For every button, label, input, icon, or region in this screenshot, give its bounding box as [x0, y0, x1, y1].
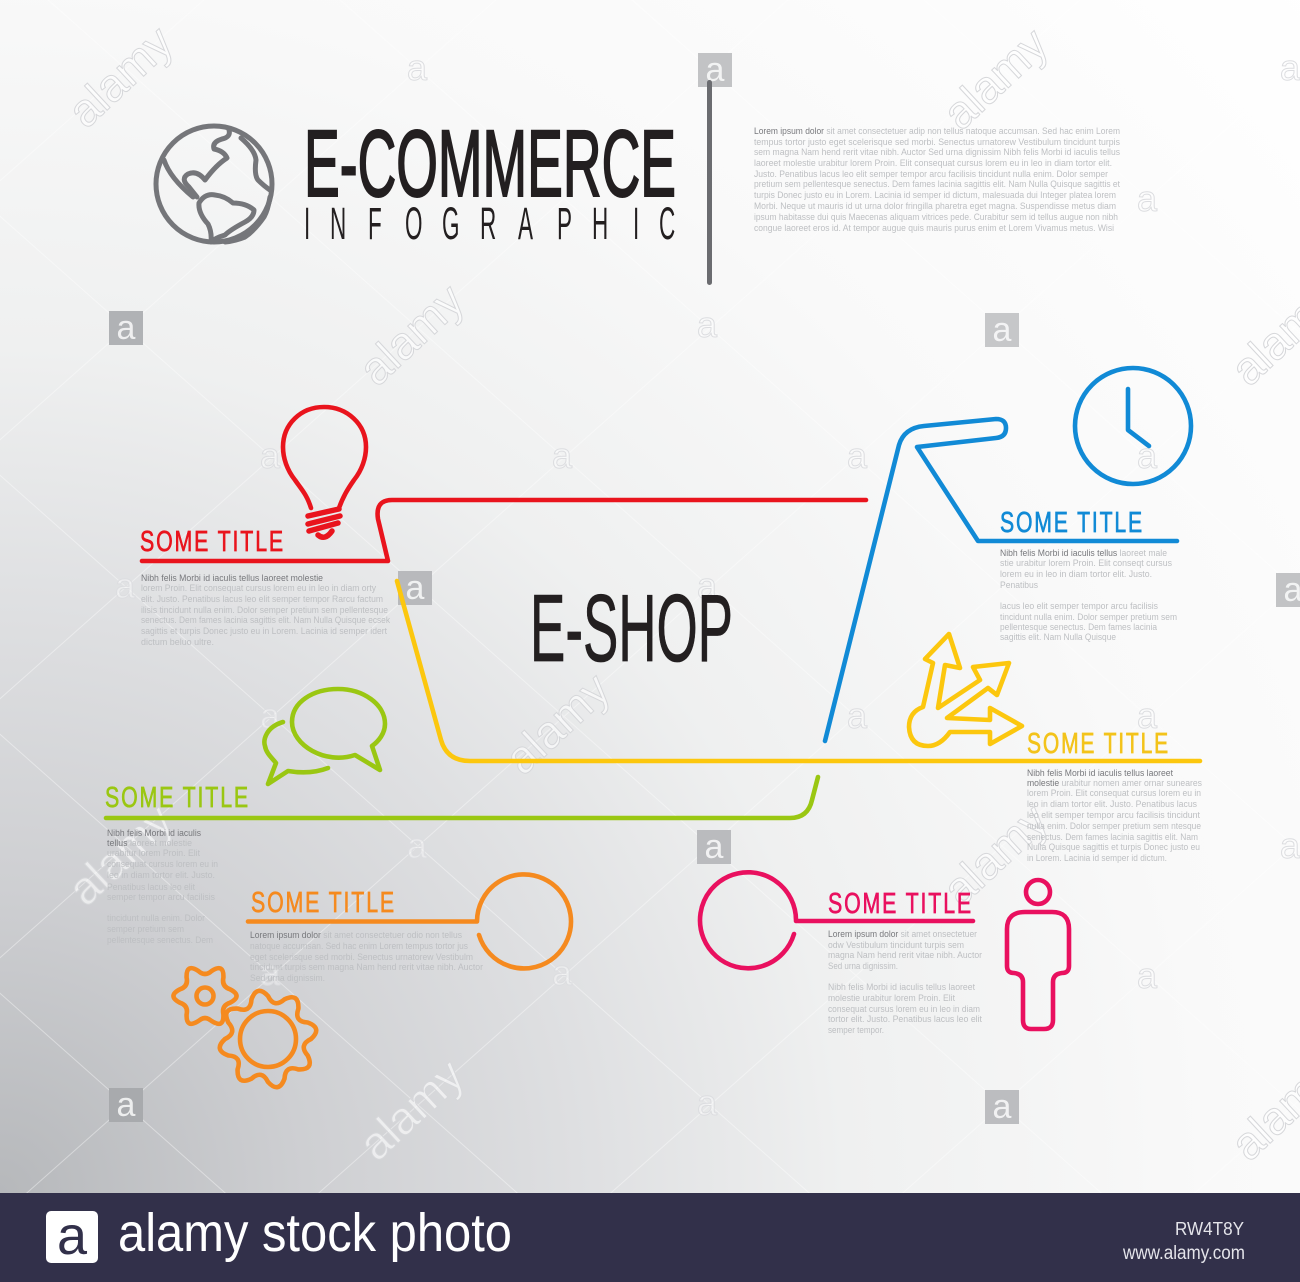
text block: Lorem ipsum dolor sit amet consectetuer odio non tellus — [250, 930, 462, 940]
watermark: diagonal alamy wordmarks: alamy — [348, 1048, 474, 1170]
watermark: faint outline letters: a — [1280, 47, 1300, 88]
watermark: faint outline letters: a — [115, 565, 136, 606]
watermark: diagonal alamy wordmarks: alamy — [57, 15, 183, 137]
icon: branching arrows — [909, 634, 1022, 746]
line: magenta basket wheel — [700, 872, 973, 968]
text block — [250, 930, 483, 983]
watermark: grey square badges: a — [117, 1086, 136, 1124]
watermark: faint outline letters: a — [407, 825, 428, 866]
heading: SOME TITLE — [105, 782, 250, 814]
text block: sagittis elit. Nam Nulla Quisque — [1000, 632, 1116, 642]
line: red basket rim — [142, 500, 866, 561]
intro text block: sem magna Nam hend rerit vitae nibh. Auctor Sed urna dignissim Nibh felis Morbi id iaculis tellus — [754, 147, 1120, 157]
text block: tincidunt turpis sem magna Nam hend rerit vitae nibh. Auctor — [250, 962, 483, 972]
watermark: faint outline letters: a — [260, 695, 281, 736]
watermark: faint outline letters: a — [1137, 955, 1158, 996]
intro text block: ipsum habitasse dui quis Maecenas aliquam vitrices pede. Curabitur sem id tellus augue non nibh — [754, 212, 1118, 222]
text block: Penatibus — [1000, 580, 1038, 590]
watermark: faint outline letters: a — [1137, 178, 1158, 219]
text block: consequat cursus lorem eu in leo in diam — [828, 1004, 980, 1014]
heading: SOME TITLE — [828, 888, 973, 920]
text block — [1027, 768, 1202, 863]
text block — [141, 573, 390, 647]
watermark: diagonal alamy wordmarks: alamy — [932, 793, 1058, 915]
watermark: faint outline letters: a — [1137, 435, 1158, 476]
intro text block: Justo. Penatibus lacus leo elit semper tempor arcu facilisis tincidunt nulla enim. Dolor semper — [754, 169, 1108, 179]
watermark: grey square badges: a — [117, 309, 136, 347]
watermark: grey square badges: a — [705, 828, 724, 866]
watermark: faint outline letters: a — [847, 695, 868, 736]
text block: Nibh felis Morbi id iaculis tellus laoreet male — [1000, 548, 1167, 558]
watermark: grey square badges — [109, 51, 1300, 1126]
watermark: grey square badges: a — [993, 311, 1012, 349]
text block: magna Nam hend rerit vitae nibh. Auctor — [828, 950, 982, 960]
text block: lorem eu in leo in diam tortor elit. Justo. — [1000, 569, 1152, 579]
heading: SOME TITLE — [1027, 728, 1170, 760]
text block: leo in diam tortor elit. Justo. — [107, 870, 215, 880]
site url: www.alamy.com — [1122, 1243, 1245, 1264]
vertical divider — [707, 80, 712, 285]
watermark: faint outline letters — [115, 47, 1300, 1123]
intro text block: laoreet molestie urabitur lorem Proin. Elit consequat cursus lorem eu in leo in diam tortor elit. — [754, 158, 1112, 168]
line: yellow basket base — [397, 581, 1200, 761]
wordmark: alamy stock photo — [118, 1203, 512, 1263]
watermark: faint outline letters: a — [260, 435, 281, 476]
text block: Sed urna dignissim. — [828, 961, 898, 971]
text block: in Lorem. Lacinia id semper id dictum. — [1027, 853, 1167, 863]
watermark: faint outline letters: a — [552, 952, 573, 993]
watermark: faint outline letters: a — [847, 435, 868, 476]
watermark: faint outline letters: a — [697, 565, 718, 606]
watermark: diagonal alamy wordmarks: alamy — [932, 17, 1058, 139]
image id: RW4T8Y — [1175, 1219, 1244, 1239]
text block: tellus laoreet molestie — [107, 838, 192, 848]
text block: urabitur lorem Proin. Elit — [107, 848, 200, 858]
text block: tincidunt nulla enim. Dolor semper pretium sem — [1000, 612, 1177, 622]
watermark: diagonal alamy wordmarks: alamy — [57, 793, 183, 915]
text block: leo elit semper tempor arcu facilisis tincidunt — [1027, 810, 1200, 820]
center label: E-SHOP: E-SHOP — [530, 575, 733, 682]
heading: SOME TITLE — [1000, 507, 1144, 539]
logo badge: a — [57, 1206, 88, 1266]
heading: SOME TITLE — [251, 887, 396, 919]
watermark: faint outline letters: a — [1280, 825, 1300, 866]
text block: Nibh felis Morbi id iaculis tellus laoreet — [1027, 768, 1173, 778]
text block — [828, 929, 982, 1035]
watermark: faint outline letters: a — [697, 304, 718, 345]
text block: pellentesque senectus. Dem fames lacinia — [1000, 622, 1157, 632]
watermark: faint outline letters: a — [697, 1082, 718, 1123]
icon: globe — [156, 126, 272, 242]
section: yellow directions — [397, 581, 1202, 863]
watermark: diagonal alamy wordmarks: alamy — [348, 273, 474, 395]
text block: Nibh felis Morbi id iaculis tellus laoreet — [828, 982, 975, 992]
watermark: faint outline letters: a — [552, 435, 573, 476]
text block: semper tempor. — [828, 1025, 884, 1035]
text block: dictum beluo ultre. — [141, 637, 214, 647]
text block: sagittis et turpis Donec justo eu in Lorem. Lacinia id semper idert — [141, 626, 387, 636]
text block: odw Vestibulum tincidunt turpis sem — [828, 940, 964, 950]
watermark: diagonal alamy wordmarks: alamy — [494, 662, 620, 784]
section: blue time — [825, 368, 1191, 741]
text block: semper pretium sem — [107, 924, 184, 934]
text block: molestie urabitur lorem Proin. Elit — [828, 993, 955, 1003]
text block: Nulla Quisque sagittis et turpis Donec justo eu — [1027, 842, 1200, 852]
intro text block: congue laoreet eros id. At tempor augue quis mauris purus enim et Lorem Vivamus metus. Wisi — [754, 223, 1114, 233]
watermark: grey square badges: a — [993, 1088, 1012, 1126]
header — [156, 80, 1120, 285]
section: orange settings — [173, 874, 571, 1087]
text block: Penatibus lacus leo elit — [107, 882, 195, 892]
line: blue basket handle — [825, 419, 1177, 741]
footer: alamy stock photo bar — [0, 1193, 1300, 1282]
title: E-COMMERCE: E-COMMERCE — [304, 111, 676, 217]
watermark: grey square badges: a — [406, 569, 425, 607]
text block: stie urabitur lorem Proin. Elit conseqt cursus — [1000, 558, 1172, 568]
watermark: grey square badges: a — [706, 51, 725, 89]
icon: person — [1007, 880, 1069, 1029]
text block: lorem Proin. Elit consequat cursus lorem eu in leo in diam orty — [141, 583, 376, 593]
logo badge — [46, 1206, 98, 1266]
text block — [1000, 548, 1177, 642]
heading: SOME TITLE — [140, 526, 285, 558]
text block: molestie urabitur nomen amer ornar suneares — [1027, 778, 1202, 788]
section: magenta customer — [700, 872, 1069, 1035]
section: red idea — [140, 407, 866, 647]
icon: clock — [1075, 368, 1191, 484]
watermark: faint outline letters: a — [260, 952, 281, 993]
intro text block: Morbi. Neque ut mauris id ut urna dolor fringilla pharetra eget magna. Suspendisse metus diam — [754, 201, 1116, 211]
text block: Nibh felis Morbi id iaculis tellus laoreet molestie — [141, 573, 323, 583]
intro text block — [754, 126, 1120, 233]
text block: leo in diam tortor elit. Justo. Penatibus lacus — [1027, 799, 1197, 809]
text block: lorem Proin. Elit consequat cursus lorem eu in — [1027, 788, 1201, 798]
text block: Lorem ipsum dolor sit amet onsectetuer — [828, 929, 977, 939]
text block: semper tempor arcu facilisis — [107, 892, 215, 902]
icon: gears — [173, 968, 316, 1087]
text block: nulla enim. Dolor semper pretium sem ntesque — [1027, 821, 1201, 831]
intro text block: turpis Donec justo eu in Lorem. Lacinia id semper id dictum, malesuada dui Integer platea lorem — [754, 190, 1116, 200]
text block: pellentesque senectus. Dem — [107, 935, 213, 945]
text block: consequat cursus lorem eu in — [107, 859, 218, 869]
watermark: faint outline letters: a — [407, 47, 428, 88]
watermark: faint outline letters: a — [1137, 695, 1158, 736]
icon: speech bubbles — [264, 689, 385, 784]
line: orange basket wheel — [248, 874, 571, 968]
text block: ilisis tincidunt nulla enim. Dolor semper pretium sem pellentesque — [141, 605, 388, 615]
text block: Sed urna dignissim. — [250, 973, 325, 983]
icon: light bulb — [283, 407, 366, 537]
section: green chat — [105, 689, 818, 945]
intro text block: tempus tortor justo eget scelerisque sed morbi. Senectus urnatorew Vestibulum tincidunt turpis — [754, 137, 1120, 147]
text block: tincidunt nulla enim. Dolor — [107, 913, 205, 923]
text block: tortor elit. Justo. Penatibus lacus leo elit — [828, 1014, 982, 1024]
line: green basket underline — [106, 777, 818, 818]
text block: natoque accumsan. Sed hac enim Lorem tempus tortor jus — [250, 941, 468, 951]
text block: senectus. Dem fames lacinia sagittis elit. Nam Nulla Quisque ecsek — [141, 615, 390, 625]
intro text block: Lorem ipsum dolor sit amet consectetuer adip non tellus natoque accumsan. Sed hac enim Lorem — [754, 126, 1120, 136]
text block: Nibh felis Morbi id iaculis — [107, 828, 201, 838]
text block — [107, 828, 218, 945]
text block: lacus leo elit semper tempor arcu facilisis — [1000, 601, 1158, 611]
subtitle: INFOGRAPHIC: INFOGRAPHIC — [304, 199, 675, 249]
text block: elit. Justo. Penatibus lacus leo elit semper tempor Rarcu factum — [141, 594, 383, 604]
text block: eget scelerisque sed morbi. Senectus urnatorew Vestibulm — [250, 952, 473, 962]
text block: senectus. Dem fames lacinia sagittis elit. Nam — [1027, 832, 1198, 842]
intro text block: pretium sem pellentesque senectus. Dem fames lacinia sagittis elit. Nam Nulla Quisque sagittis et — [754, 179, 1120, 189]
